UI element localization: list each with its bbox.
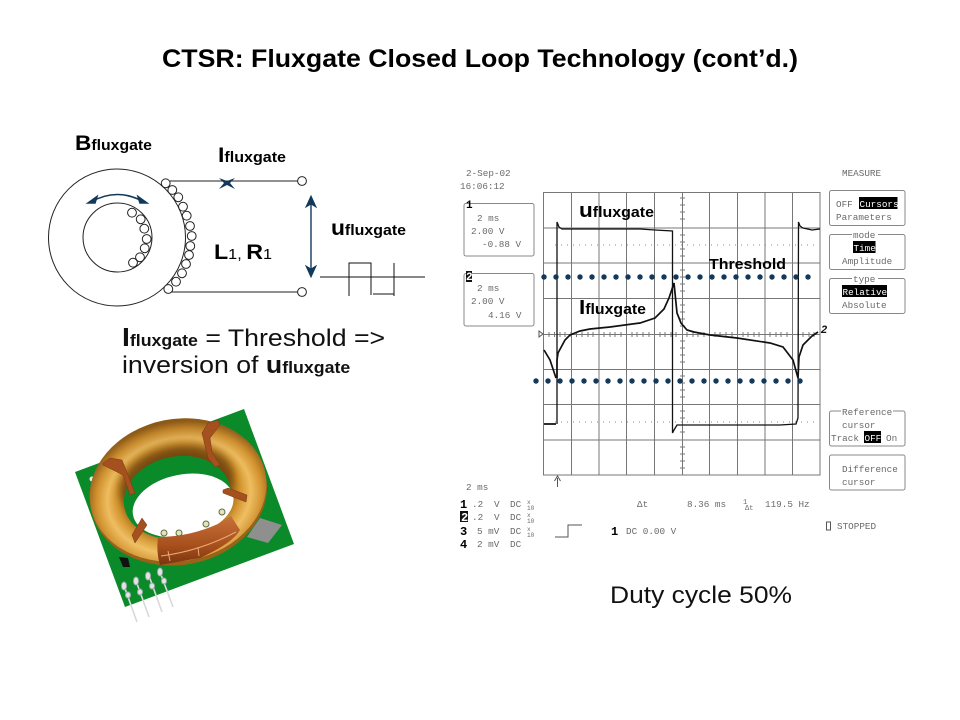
text: threshold inversion statement: inversion of [122,352,266,379]
scope label: I fluxgate: Ifluxgate [579,296,646,319]
threshold dots upper [541,274,811,280]
channel 2 readout: 2.00 V [471,296,505,307]
diagram: fluxgate toroid circuit [48,131,425,306]
cursor measurement readout: 119.5 Hz [765,499,810,510]
scope label: u fluxgate: ufluxgate [579,199,654,222]
torus [77,403,280,581]
cursor measurement readout: 8.36 ms [687,499,726,510]
trigger settings [555,525,677,539]
time base and channel settings: DC [510,499,522,510]
timestamp: 2-Sep-02 [466,168,511,179]
channel 1 readout: 2 ms [477,213,499,224]
time base and channel settings: 5 mV [477,526,500,537]
channel 2 trace: I fluxgate [544,283,818,424]
label: B fluxgate: Bfluxgate [75,131,152,155]
time base and channel settings: x [527,512,531,519]
square wave [320,263,425,296]
voltage arrow [306,196,316,277]
toroid core [48,169,186,306]
menu: reference cursor: Reference [842,407,892,418]
channel 1 readout: -0.88 V [482,239,521,250]
menu: difference cursor: cursor [842,477,875,488]
text: threshold inversion statement: I [122,322,130,352]
channel 1 readout: 1 [466,200,473,212]
inner winding turns [128,208,151,267]
solder posts [161,509,225,536]
time base and channel settings: x [527,499,531,506]
trigger settings: 1 [611,525,618,539]
text: threshold inversion statement: fluxgate = Threshold => [130,325,385,352]
terminal wires [170,177,306,296]
circuit board [75,409,294,607]
cursor measurement readout: Δt [637,499,648,510]
menu: reference cursor [830,406,905,446]
time base and channel settings: 10 [527,505,535,512]
menu: cursors: Parameters [836,212,892,223]
connector pins [122,568,173,622]
time base and channel settings: 3 [460,525,467,539]
timestamp [460,168,511,192]
time base and channel settings: DC [510,539,522,550]
time base and channel settings: 4 [460,538,467,552]
menu: cursors: Cursors [860,199,899,210]
trigger arrow [554,476,560,487]
measure heading: MEASURE [842,168,881,179]
3D sensor model [75,403,294,622]
cursor measurement readout: 1 [743,499,747,507]
time base and channel settings [460,482,535,552]
time base and channel settings: .2 [472,499,483,510]
text: threshold inversion statement: ufluxgate [266,352,350,379]
trigger settings: DC 0.00 V [626,526,677,537]
menu: difference cursor [830,455,905,490]
chip [247,518,282,543]
menu: mode [830,230,905,270]
label: L1 R1: L1, R1 [214,240,272,264]
time base and channel settings: 2 [461,511,468,525]
oscilloscope screenshot [460,168,905,552]
menu: cursors: OFF [836,199,853,210]
trigger level marker [539,331,543,337]
menu: type: Absolute [842,300,887,311]
graticule [544,192,820,475]
trace labels: channel 2: 2 [820,324,827,336]
menu: type [830,274,905,314]
central opening [117,447,239,548]
menu: reference cursor: cursor [842,420,875,431]
caption: duty cycle: Duty cycle 50% [610,582,792,609]
channel 2 readout [464,271,534,326]
time base and channel settings: 10 [527,518,535,525]
outer winding turns [161,179,196,293]
label: I fluxgate: Ifluxgate [218,143,286,167]
channel 2 readout: 4.16 V [488,310,522,321]
menu: difference cursor: Difference [842,464,898,475]
cursor measurement readout: Δt [745,505,753,513]
timestamp: 16:06:12 [460,181,505,192]
time base and channel settings: 2 ms [466,482,488,493]
current marker [219,178,235,189]
menu: mode: Time [854,243,876,254]
copper winding [157,516,240,565]
channel 2 readout: 2 ms [477,283,499,294]
menu: reference cursor: Track [831,433,859,444]
channel 1 trace: u fluxgate [557,222,820,433]
channel 2 readout: 2 [466,272,473,284]
time base and channel settings: 1 [460,498,467,512]
time base and channel settings: DC [510,526,522,537]
cursor measurement readout [637,499,810,513]
time base and channel settings: x [527,526,531,533]
time base and channel settings: DC [510,512,522,523]
menu: reference cursor: On [886,433,897,444]
time base and channel settings: 2 mV [477,539,500,550]
menu: mode: mode [853,230,875,241]
menu: type: Relative [842,287,887,298]
black component [119,557,130,567]
menu: cursors [830,190,905,226]
time base and channel settings: .2 [472,512,483,523]
copper clips [103,420,247,543]
scope label: threshold: Threshold [709,257,786,273]
time base and channel settings: V [494,499,500,510]
time base and channel settings: V [494,512,500,523]
menu: mode: Amplitude [842,256,892,267]
menu: reference cursor: OFF [864,433,881,444]
channel 1 readout [464,200,534,256]
threshold dots lower [533,378,803,384]
title: CTSR: Fluxgate Closed Loop Technology (cont’d.) [162,45,798,73]
menu: type: type [853,274,875,285]
stopped indicator: STOPPED [837,521,876,532]
channel 1 readout: 2.00 V [471,226,505,237]
time base and channel settings: 10 [527,532,535,539]
flux direction arrow [88,194,147,203]
label: u fluxgate: ufluxgate [331,216,406,240]
